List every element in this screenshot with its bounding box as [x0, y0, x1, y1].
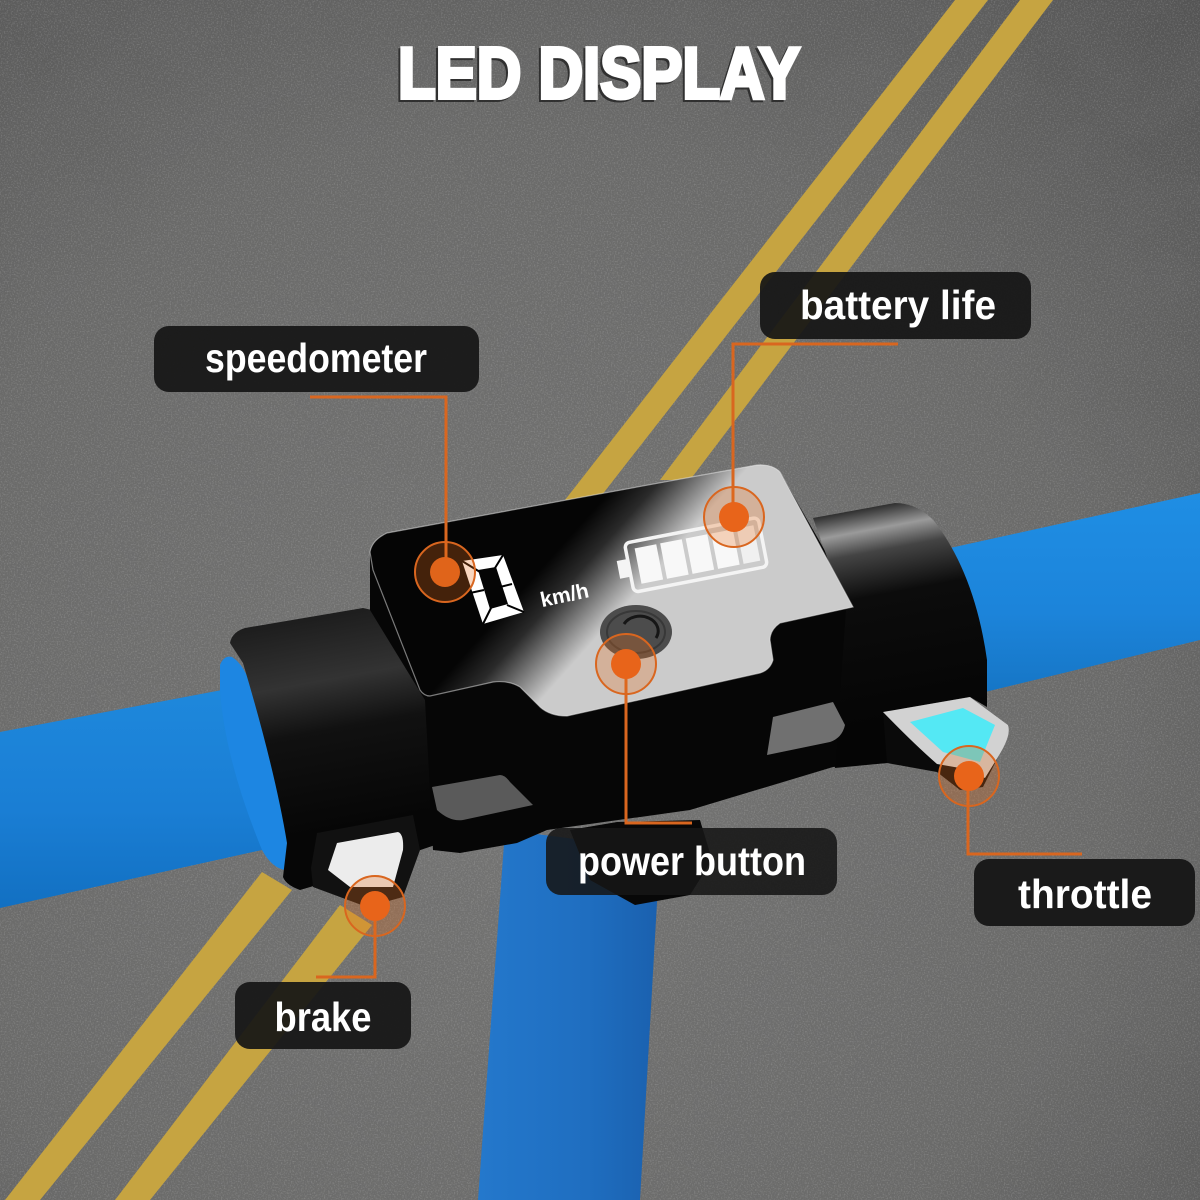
label: speedometer: speedometer	[205, 335, 427, 381]
label: brake	[235, 982, 411, 1049]
marker: throttle	[939, 746, 999, 806]
battery icon	[614, 517, 768, 594]
right blue grip	[950, 493, 1200, 692]
label: battery life: battery life	[800, 282, 996, 328]
left blue grip	[0, 690, 262, 908]
title: LED DISPLAY	[398, 34, 800, 114]
grip end cap	[220, 657, 287, 870]
leader line: power button	[626, 664, 692, 823]
housing slot: right	[767, 702, 845, 755]
speed digit	[462, 555, 524, 624]
stem clamp under label	[570, 820, 712, 905]
marker: brake	[345, 876, 405, 936]
marker: battery life	[704, 487, 764, 547]
label: speedometer	[154, 326, 479, 392]
scooter stem	[478, 830, 660, 1200]
label: throttle	[974, 859, 1195, 926]
handlebar housing	[230, 472, 987, 890]
power button	[600, 605, 672, 659]
housing slot: left	[432, 775, 533, 820]
marker: speedometer	[415, 542, 475, 602]
label: throttle: throttle	[1018, 871, 1152, 917]
title: LED DISPLAY	[396, 36, 798, 116]
label: power button: power button	[578, 838, 806, 884]
marker: power button	[596, 634, 656, 694]
label: power button	[546, 828, 837, 895]
label: brake: brake	[274, 994, 372, 1040]
leader line: battery life	[733, 344, 898, 517]
LED display panel	[370, 465, 853, 716]
speed unit: km/h	[538, 579, 591, 612]
leader line: throttle	[968, 776, 1082, 854]
brake lever	[311, 815, 420, 907]
leader line: speedometer	[310, 397, 446, 572]
label: battery life	[760, 272, 1031, 339]
leader line: brake	[316, 906, 375, 977]
throttle lever	[883, 697, 1009, 790]
